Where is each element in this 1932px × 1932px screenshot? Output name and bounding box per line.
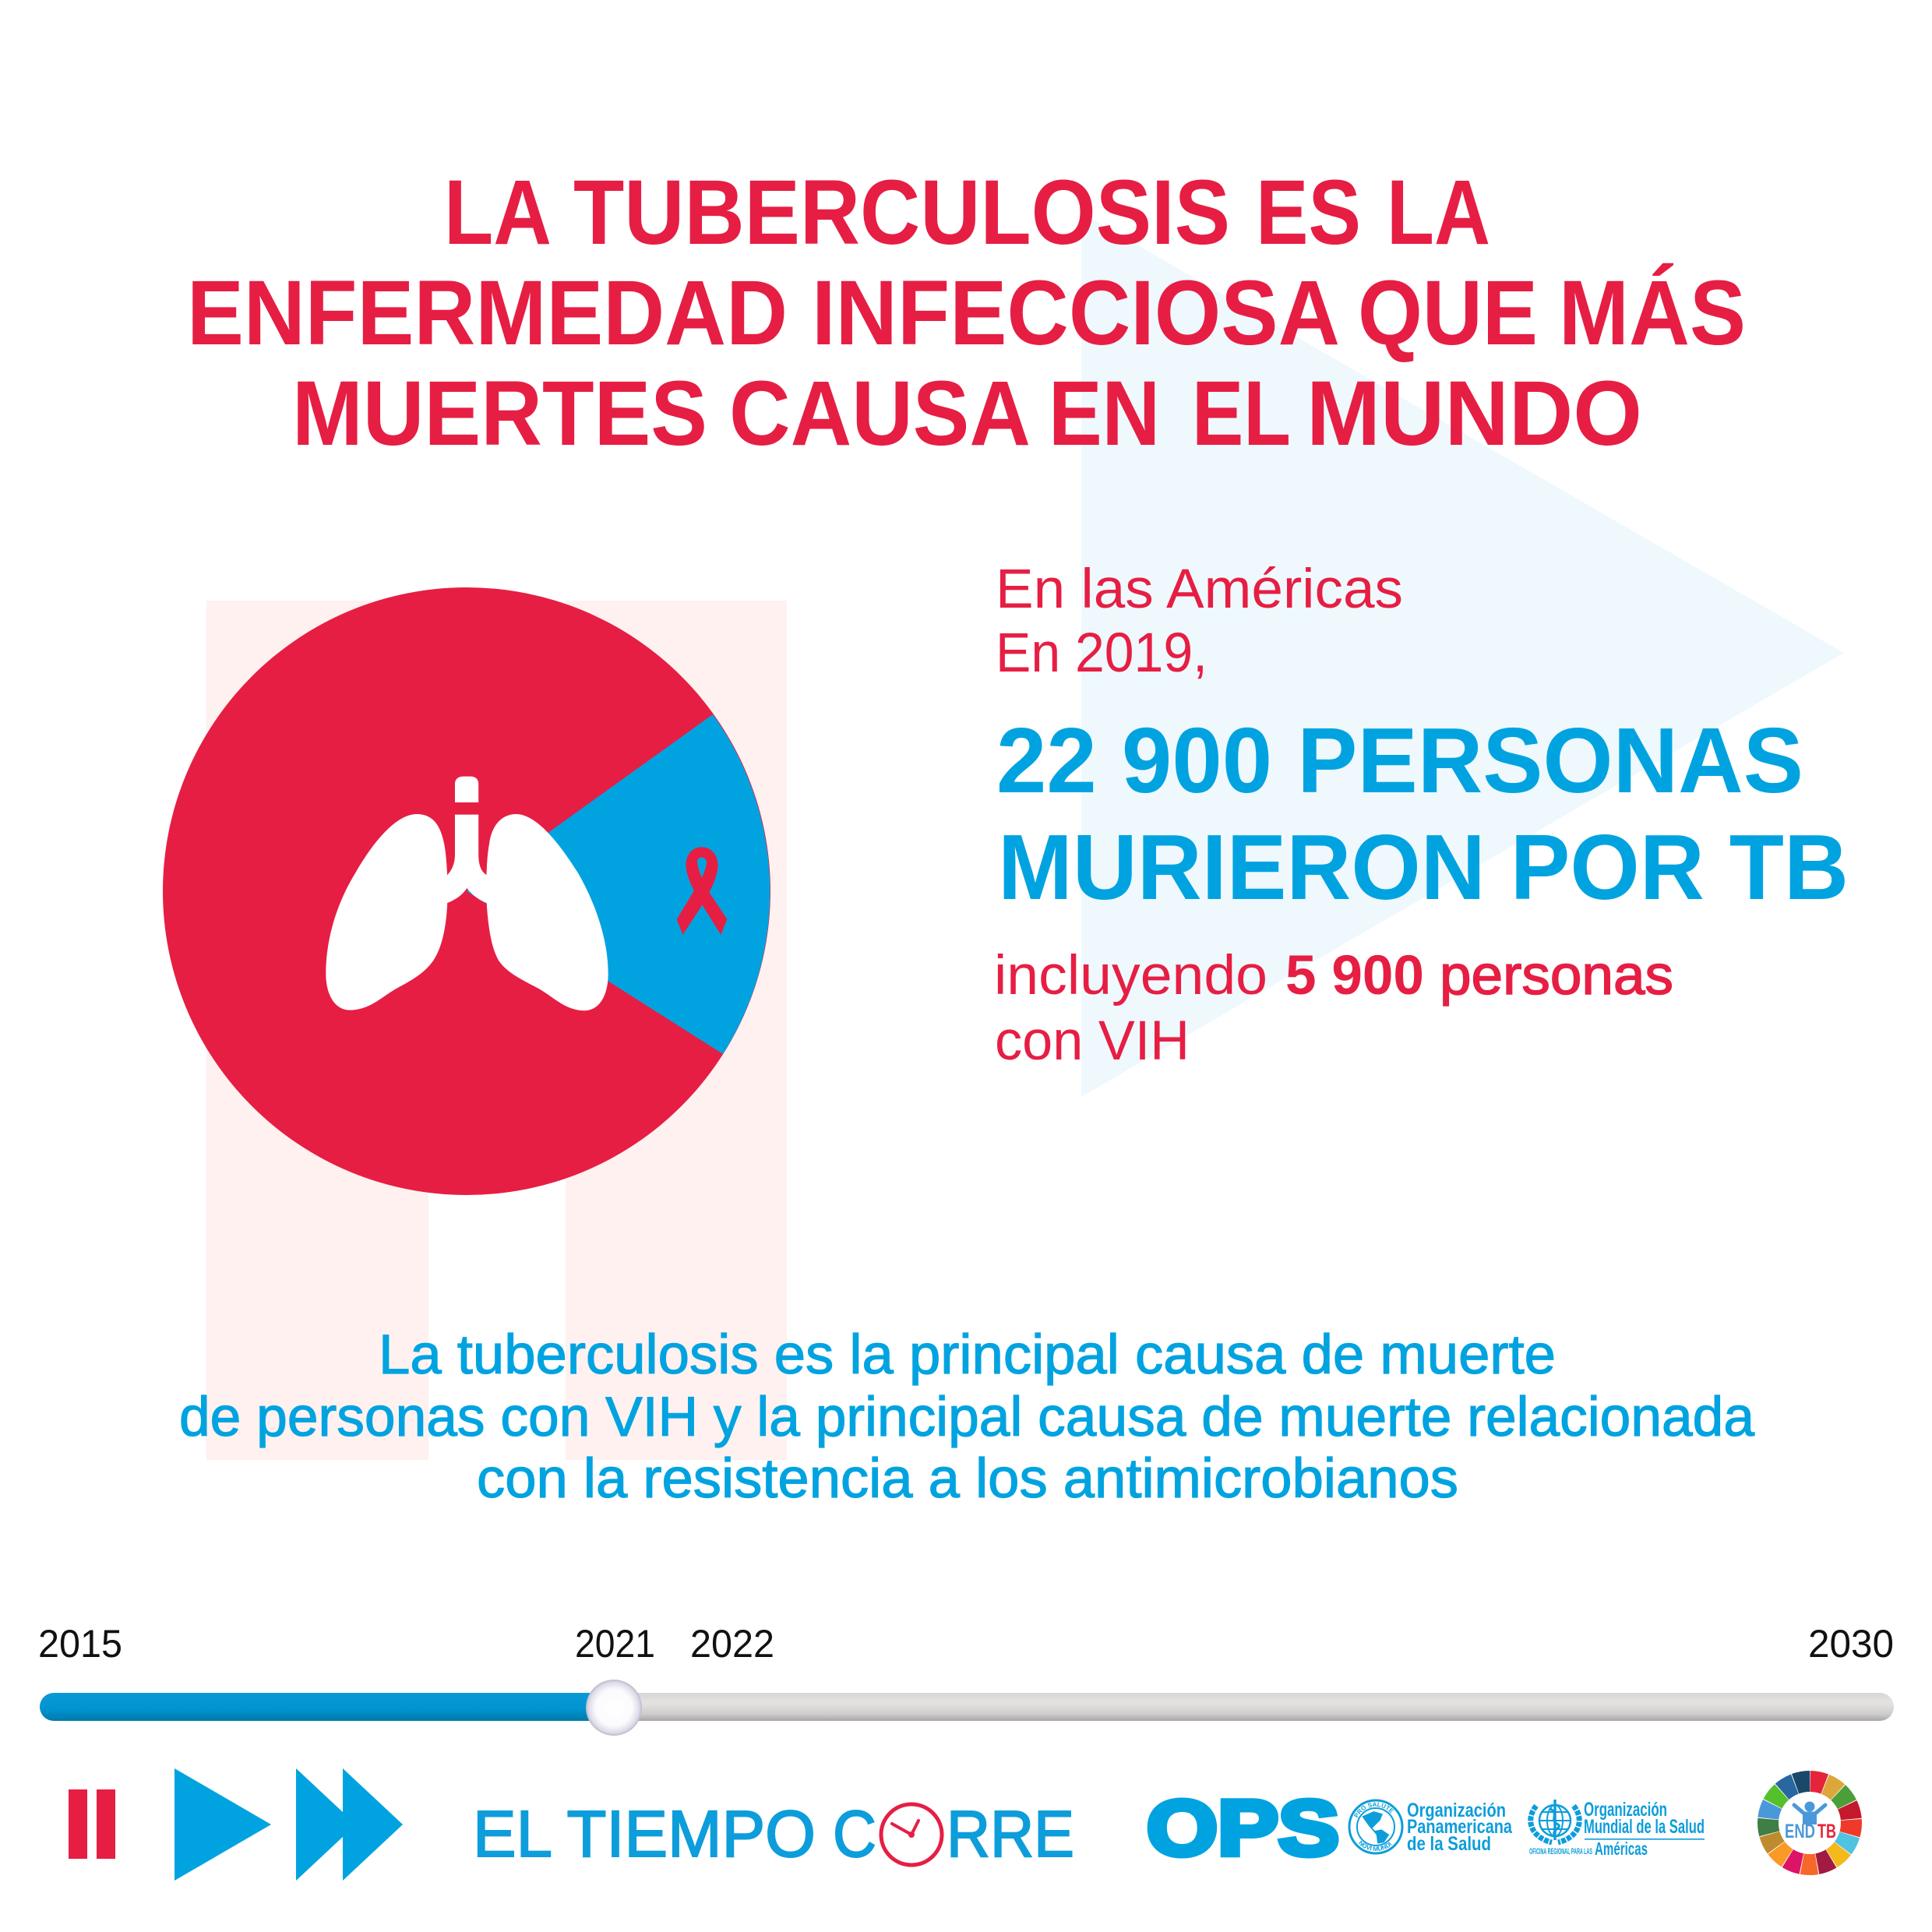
icon: lungs xyxy=(326,777,608,1010)
icon: fast forward xyxy=(296,1768,403,1881)
timeline year labels xyxy=(38,1622,1894,1666)
End TB label: TB xyxy=(1817,1821,1836,1842)
icon: red ribbon xyxy=(677,847,727,935)
title: MUERTES xyxy=(292,362,707,465)
title: ENFERMEDAD xyxy=(187,262,788,365)
text block: leading cause of death: con la resistencia a los antimicrobianos xyxy=(477,1448,1458,1510)
timeline year labels: 2030 xyxy=(1808,1622,1894,1666)
title: LA xyxy=(444,161,552,264)
logo: OPS: OPS xyxy=(1147,1785,1339,1872)
logo: End TB wheel xyxy=(1750,1764,1869,1882)
logo text: Organización Mundial de la Salud: Américas xyxy=(1595,1839,1648,1859)
title: MÁS xyxy=(1559,262,1746,365)
pie slice: all TB deaths xyxy=(163,587,770,1195)
End TB label: END xyxy=(1785,1821,1815,1842)
title: ES xyxy=(1256,161,1361,264)
title: CAUSA xyxy=(729,362,1031,465)
logo text: Organización Mundial de la Salud: OFICINA REGIONAL PARA LAS xyxy=(1529,1847,1592,1856)
icon: play xyxy=(175,1768,271,1881)
headline statistic xyxy=(996,709,1849,919)
intro text: En las Américas xyxy=(996,559,1403,620)
logo text: Organización Mundial de la Salud: Organización xyxy=(1584,1799,1667,1821)
title: QUE xyxy=(1358,262,1538,365)
pie slice: TB deaths with HIV xyxy=(467,714,770,1054)
slider knob xyxy=(586,1680,642,1736)
logo text: Organización Panamericana de la Salud: Organización xyxy=(1407,1800,1506,1821)
title: TUBERCULOSIS xyxy=(573,161,1230,264)
timeline year labels: 2022 xyxy=(690,1622,774,1666)
HIV statistic xyxy=(994,945,1673,1072)
logo: PAHO emblem: PRO SALUTE xyxy=(1354,1803,1394,1818)
HIV statistic: personas xyxy=(1440,945,1673,1007)
headline statistic: 22 900 PERSONAS xyxy=(996,709,1803,813)
logo: PAHO emblem: NOVI MUNDI xyxy=(1359,1840,1391,1851)
title: EL xyxy=(1192,362,1291,465)
slogan: el tiempo corre xyxy=(473,1797,1074,1870)
title: MUNDO xyxy=(1306,362,1642,465)
title: LA xyxy=(1387,161,1490,264)
icon: person with raised arms xyxy=(1794,1801,1825,1824)
pie chart: TB deaths with HIV share xyxy=(163,587,770,1195)
timeline year labels: 2021 xyxy=(575,1622,655,1666)
logo: PAHO emblem xyxy=(1348,1800,1404,1854)
background triangle xyxy=(1081,213,1844,1097)
timeline year labels: 2015 xyxy=(38,1622,122,1666)
slogan text: C xyxy=(833,1797,876,1870)
logo text: Organización Panamericana de la Salud xyxy=(1407,1800,1513,1855)
title: EN xyxy=(1049,362,1160,465)
logo text: Organización Mundial de la Salud: Mundial de la Salud xyxy=(1584,1816,1705,1838)
logo: WHO emblem xyxy=(1531,1800,1579,1842)
slogan text: EL TIEMPO xyxy=(473,1797,816,1870)
timeline slider xyxy=(38,1622,1894,1736)
slogan text xyxy=(473,1797,1074,1870)
intro text xyxy=(996,559,1403,684)
title xyxy=(187,161,1746,465)
headline statistic: MURIERON POR TB xyxy=(998,816,1849,919)
icon: pause xyxy=(69,1789,115,1859)
text block: leading cause of death: La tuberculosis es la principal causa de muerte xyxy=(379,1324,1556,1386)
slider track remaining xyxy=(545,1693,1894,1721)
logo text: Organización Mundial de la Salud xyxy=(1529,1799,1705,1859)
HIV statistic: incluyendo xyxy=(994,945,1267,1007)
logo text: Organización Panamericana de la Salud: de la Salud xyxy=(1407,1833,1491,1855)
text block: leading cause of death: de personas con VIH y la principal causa de muerte relacionada xyxy=(179,1387,1755,1448)
slogan text: RRE xyxy=(947,1797,1074,1870)
wheel segments xyxy=(1750,1764,1869,1882)
slider track elapsed xyxy=(40,1693,614,1721)
icon: clock xyxy=(881,1804,942,1865)
intro text: En 2019, xyxy=(996,622,1208,684)
text block: regional statistics xyxy=(994,559,1849,1072)
text block: leading cause of death xyxy=(179,1324,1755,1510)
logo text: Organización Panamericana de la Salud: Panamericana xyxy=(1407,1816,1513,1838)
title: INFECCIOSA xyxy=(812,262,1340,365)
HIV statistic: con VIH xyxy=(995,1010,1190,1072)
background pause bars xyxy=(206,601,787,1460)
HIV statistic: 5 900 xyxy=(1285,945,1424,1007)
